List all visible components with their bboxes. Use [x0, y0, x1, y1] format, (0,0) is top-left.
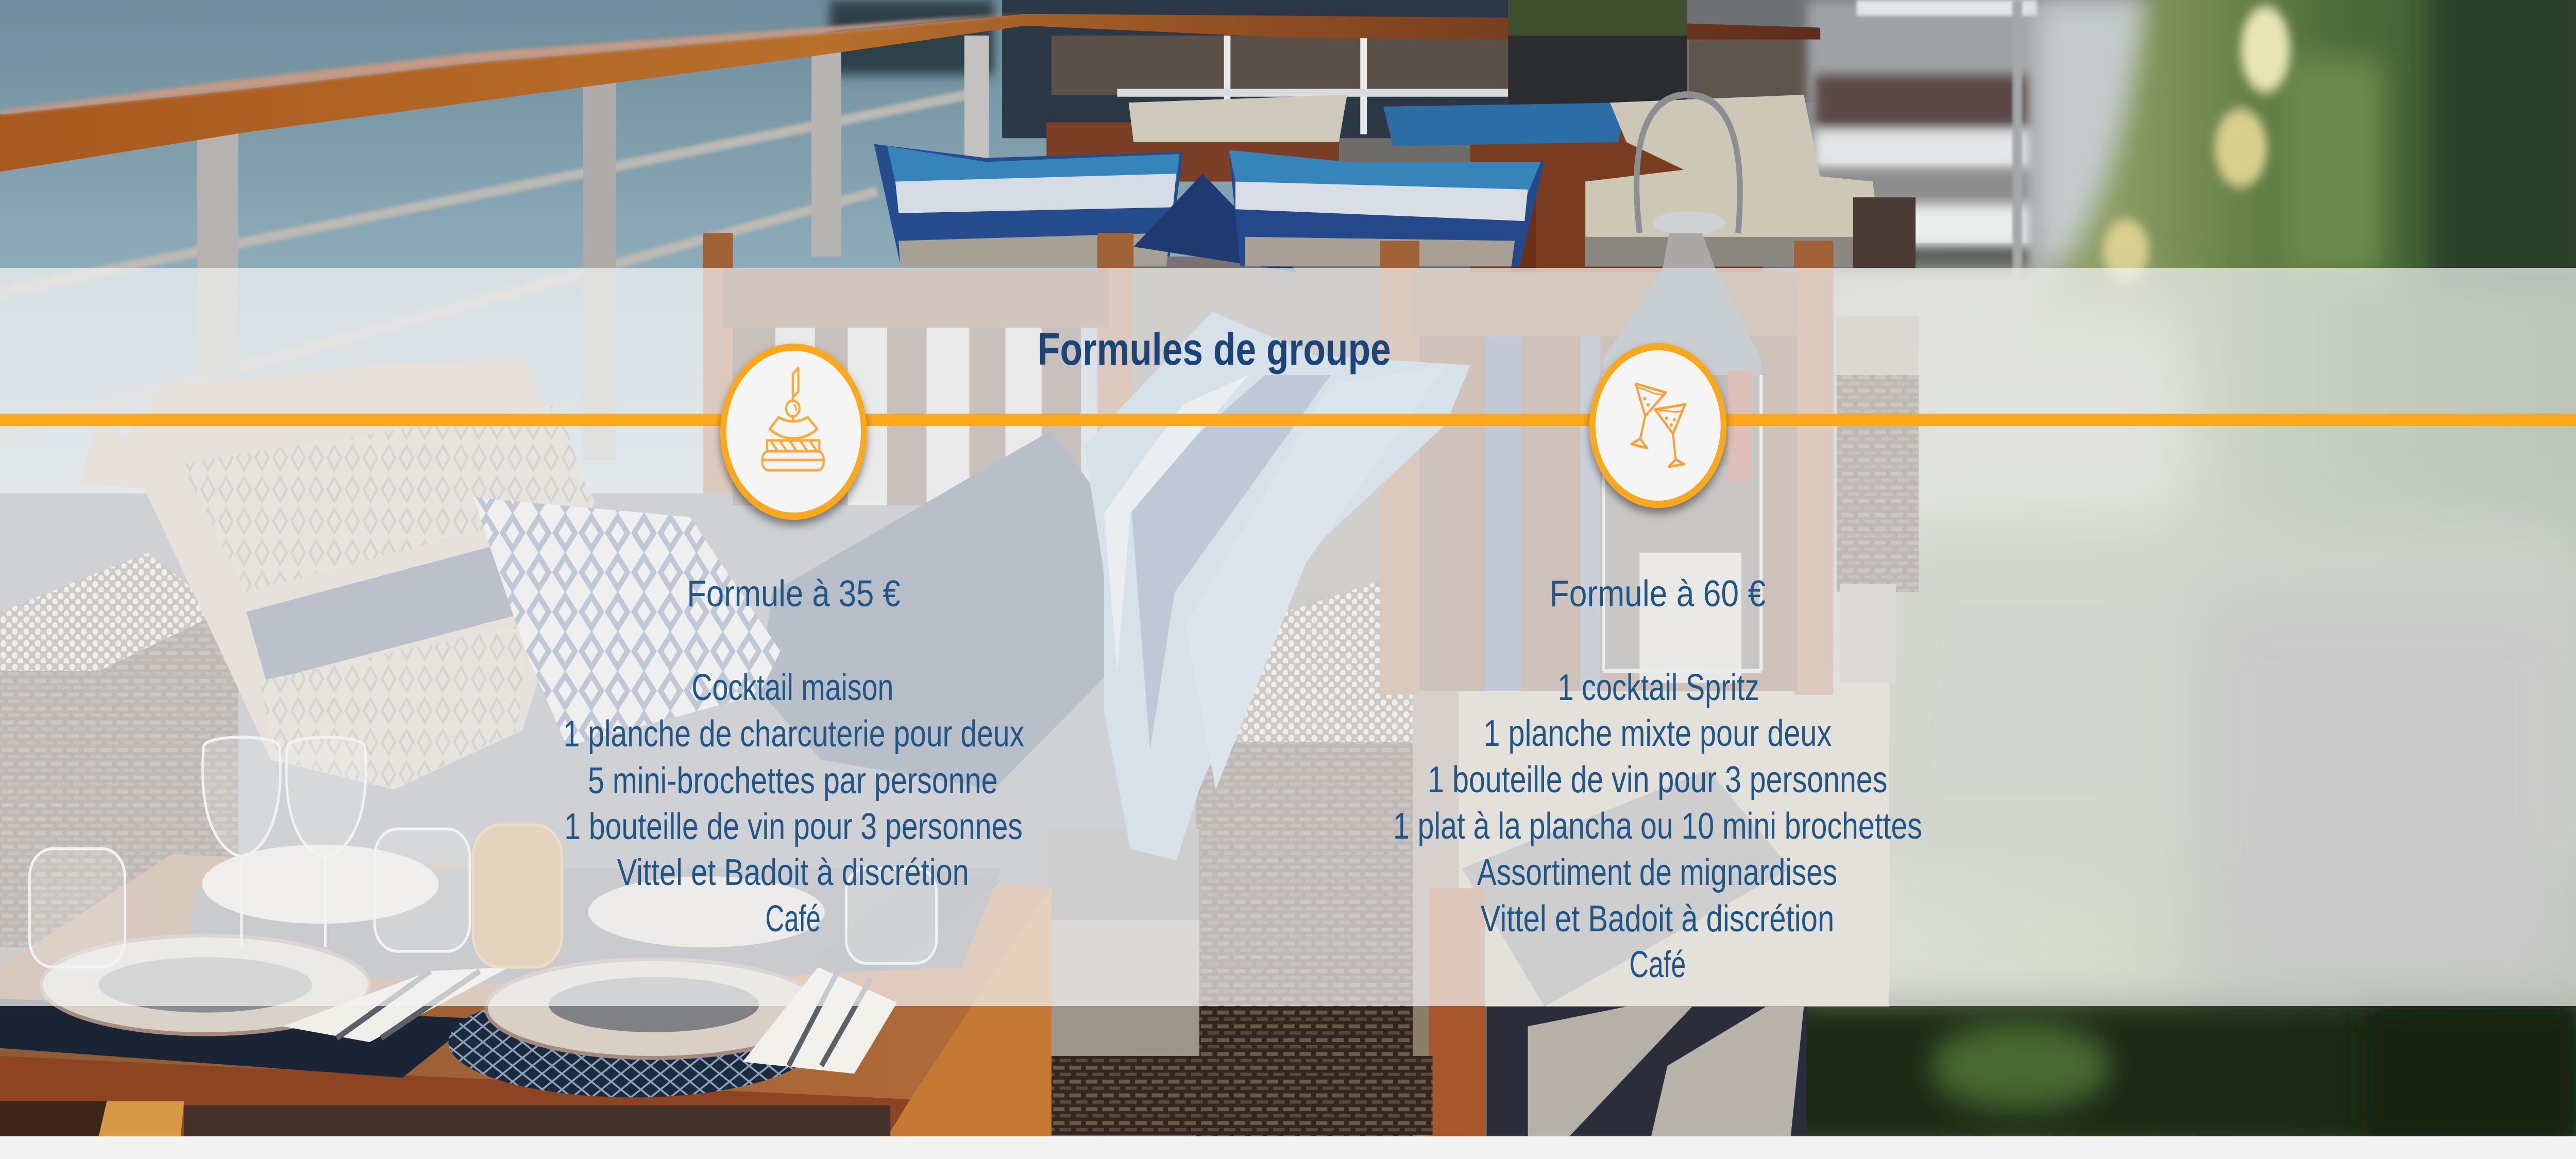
item: Vittel et Badoit à discrétion: [1481, 898, 1834, 940]
photo: dining table: [0, 845, 1052, 1137]
item: 1 cocktail Spritz: [1557, 667, 1759, 708]
photo: low table and floor behind: [1446, 316, 1919, 1137]
item: 1 planche de charcuterie pour deux: [564, 713, 1024, 755]
photo: back chairs: [1046, 123, 1763, 280]
photo: blurred bush: [1774, 0, 2576, 1159]
item: 1 bouteille de vin pour 3 personnes: [1428, 759, 1887, 800]
photo: river water: [0, 0, 1234, 493]
photo: distant boat and upper deck: [829, 0, 2201, 1007]
translucent white band: [0, 268, 2576, 1006]
circle icon: cocktail glasses: [1592, 347, 1724, 504]
photo: front wooden chairs: [703, 233, 1834, 695]
heading: formule 35: Formule à 35 €: [687, 573, 901, 615]
photo: big beige cushion: [79, 359, 595, 790]
title: Formules de groupe: [1038, 325, 1391, 375]
photo: lantern: [1603, 95, 1761, 683]
item: 1 planche mixte pour deux: [1483, 713, 1832, 754]
circle icon: canapé skewer: [723, 347, 864, 516]
photo: sofa seat shadow: [0, 493, 1208, 908]
orange timeline line: [0, 414, 2576, 426]
item: Café: [1629, 944, 1686, 985]
photo: navy cushion: [759, 430, 1111, 790]
photo: blue and white cushion: [1084, 312, 1470, 861]
item: 1 plat à la plancha ou 10 mini brochettes: [1393, 806, 1922, 847]
photo: back cushions: [874, 95, 1916, 272]
item: 5 mini-brochettes par personne: [588, 760, 998, 802]
photo: left and right wicker sofa: [0, 553, 1485, 1137]
photo: diamond patterned cushion: [473, 498, 781, 746]
photo: glassware: [29, 737, 937, 967]
text block: formule 60 euros: [1393, 573, 1922, 985]
heading: formule 60: Formule à 60 €: [1550, 573, 1766, 615]
item: Vittel et Badoit à discrétion: [617, 852, 969, 893]
item: Assortiment de mignardises: [1477, 852, 1837, 893]
item: Cocktail maison: [691, 667, 893, 708]
item: Café: [766, 898, 821, 940]
text block: formule 35 euros: [564, 573, 1024, 940]
photo: deck railing: [0, 14, 1820, 460]
photo: planter: [1508, 0, 1687, 116]
item: 1 bouteille de vin pour 3 personnes: [564, 806, 1023, 847]
